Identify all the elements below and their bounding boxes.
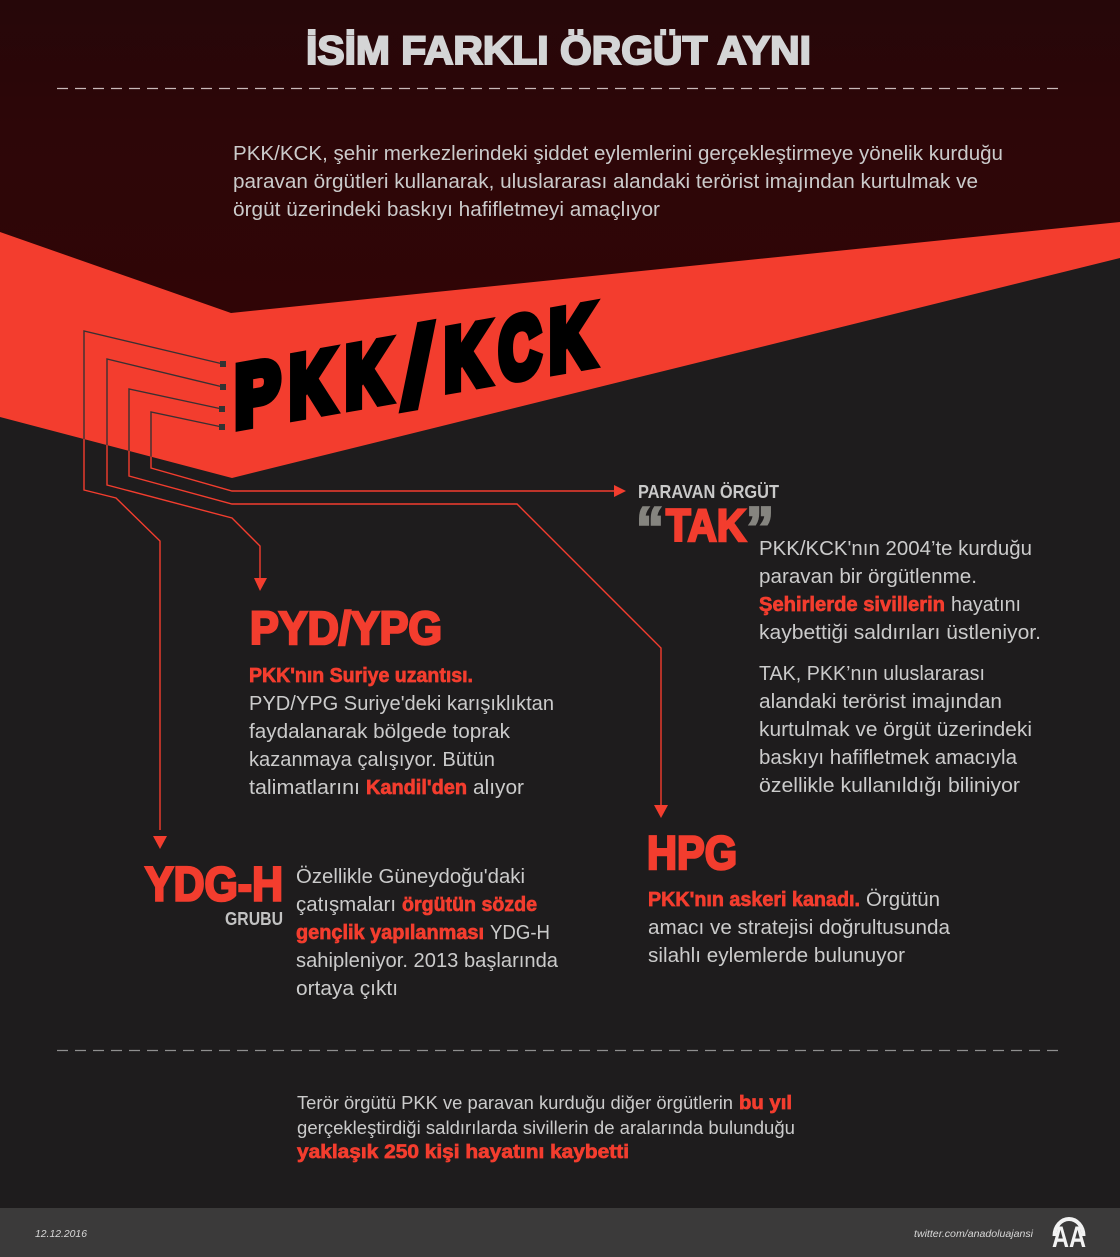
- title: İSİM FARKLI ÖRGÜT AYNI: [306, 28, 811, 73]
- PYD/YPG heading: PYD/YPG: [250, 602, 442, 654]
- HPG description: Örgütün: [866, 888, 940, 911]
- TAK description: paravan bir örgütlenme.: [759, 565, 977, 588]
- TAK description: Şehirlerde sivillerin: [759, 593, 945, 616]
- YDG-H sublabel: GRUBU: [225, 909, 283, 929]
- panel: YDG-H: [145, 858, 559, 1000]
- YDG-H description: sahipleniyor. 2013 başlarında: [296, 949, 559, 972]
- intro text: PKK/KCK, şehir merkezlerindeki şiddet eylemlerini gerçekleştirmeye yönelik kurduğu: [233, 142, 1003, 165]
- HPG description: silahlı eylemlerde bulunuyor: [648, 944, 905, 967]
- PYD/YPG description: alıyor: [473, 776, 524, 799]
- TAK heading: TAK: [666, 500, 746, 551]
- main label: PKK/KCK: [235, 274, 594, 463]
- TAK description: PKK/KCK'nın 2004’te kurduğu: [759, 537, 1032, 560]
- YDG-H description: gençlik yapılanması: [296, 921, 484, 944]
- PYD/YPG description: [249, 664, 554, 799]
- date: 12.12.2016: [35, 1228, 87, 1240]
- main label: PKK/KCK: P: [235, 343, 280, 446]
- intro text: örgüt üzerindeki baskıyı hafifletmeyi amaçlıyor: [233, 198, 660, 221]
- TAK description: [759, 537, 1041, 797]
- closing statement: Terör örgütü PKK ve paravan kurduğu diğer örgütlerin: [297, 1092, 733, 1113]
- closing statement: [297, 1092, 795, 1163]
- closing statement: bu yıl: [739, 1093, 792, 1114]
- intro text: paravan örgütleri kullanarak, uluslararası alandaki terörist imajından kurtulmak ve: [233, 170, 978, 193]
- main label: PKK/KCK: K: [444, 306, 489, 409]
- TAK description: baskıyı hafifletmek amacıyla: [759, 746, 1018, 769]
- PYD/YPG description: faydalanarak bölgede toprak: [249, 720, 511, 743]
- YDG-H description: Özellikle Güneydoğu'daki: [296, 865, 525, 888]
- TAK description: TAK, PKK’nın uluslararası: [759, 662, 985, 685]
- TAK opening quote: “: [636, 495, 664, 562]
- panel: HPG: [647, 826, 951, 967]
- YDG-H description: çatışmaları: [296, 893, 396, 916]
- panel: TAK: [636, 481, 1041, 797]
- footer bar: [0, 1208, 1120, 1257]
- intro text: [233, 142, 1003, 221]
- main label: PKK/KCK: K: [550, 287, 594, 391]
- main label: PKK/KCK: C: [499, 297, 540, 399]
- TAK description: özellikle kullanıldığı biliniyor: [759, 774, 1020, 797]
- main label: PKK/KCK: /: [400, 302, 435, 434]
- PYD/YPG description: talimatlarını: [249, 776, 360, 799]
- main label: PKK/KCK: K: [290, 333, 334, 436]
- main label: PKK/KCK: K: [346, 323, 390, 426]
- panel: PYD/YPG: [249, 602, 554, 799]
- PYD/YPG description: PYD/YPG Suriye'deki karışıklıktan: [249, 692, 554, 715]
- HPG description: PKK'nın askeri kanadı.: [648, 888, 860, 911]
- HPG heading: HPG: [647, 826, 737, 879]
- red diagonal band: [0, 222, 1120, 478]
- PYD/YPG description: Kandil'den: [366, 776, 467, 799]
- connector lines from PKK/KCK: [84, 331, 668, 849]
- HPG description: [648, 888, 951, 967]
- closing statement: yaklaşık 250 kişi hayatını kaybetti: [297, 1142, 629, 1163]
- TAK eyebrow: PARAVAN ÖRGÜT: [638, 481, 780, 502]
- HPG description: amacı ve stratejisi doğrultusunda: [648, 916, 951, 939]
- YDG-H description: örgütün sözde: [402, 893, 537, 916]
- TAK description: kurtulmak ve örgüt üzerindeki: [759, 718, 1032, 741]
- social handle: twitter.com/anadoluajansi: [914, 1228, 1034, 1240]
- TAK closing quote: ”: [746, 495, 774, 562]
- icon: Anadolu Agency logo: AA: [1052, 1221, 1086, 1254]
- background: upper maroon panel: [0, 0, 1120, 315]
- YDG-H description: ortaya çıktı: [296, 977, 398, 1000]
- PYD/YPG description: kazanmaya çalışıyor. Bütün: [249, 748, 495, 771]
- TAK description: hayatını: [951, 593, 1021, 616]
- YDG-H description: [296, 865, 559, 1000]
- PYD/YPG description: PKK'nın Suriye uzantısı.: [249, 664, 473, 687]
- TAK description: alandaki terörist imajından: [759, 690, 1002, 713]
- YDG-H heading: YDG-H: [145, 858, 283, 912]
- YDG-H description: YDG-H: [490, 921, 550, 944]
- TAK description: kaybettiği saldırıları üstleniyor.: [759, 621, 1041, 644]
- closing statement: gerçekleştirdiği saldırılarda sivillerin de aralarında bulunduğu: [297, 1117, 795, 1138]
